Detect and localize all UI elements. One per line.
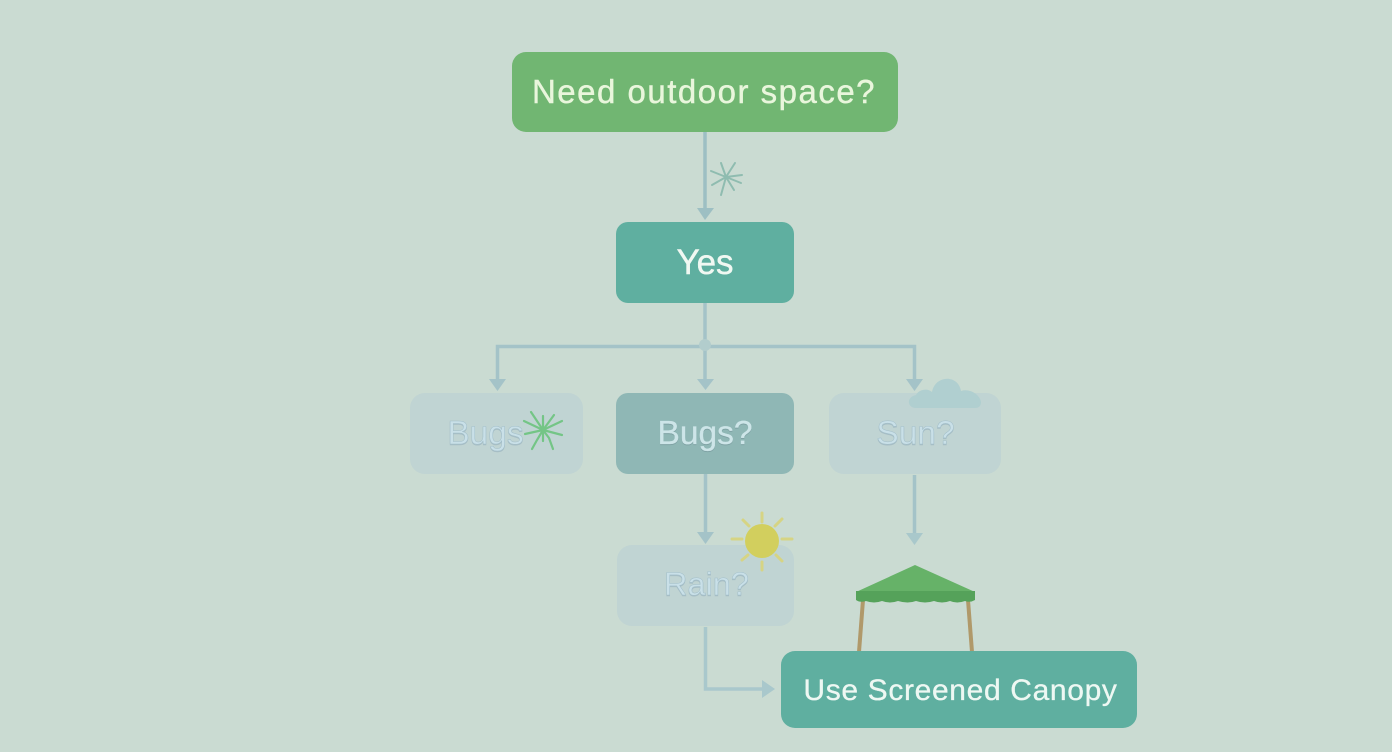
arrow: sun to canopy <box>906 475 923 545</box>
icon: green bug <box>524 412 562 449</box>
node: bugs middle <box>616 393 794 474</box>
arrow: middle bugs to rain <box>697 474 714 544</box>
node: bugs left: Bugs <box>447 415 524 452</box>
node: need outdoor space: Need outdoor space? <box>532 73 876 110</box>
node: rain: Rain? <box>664 566 749 602</box>
node: use screened canopy: Use Screened Canopy <box>803 674 1118 707</box>
node: rain <box>617 545 794 626</box>
node: sun: Sun? <box>876 415 955 452</box>
icon: cloud <box>909 379 981 408</box>
node: need outdoor space <box>512 52 898 132</box>
icon: canopy <box>856 565 975 652</box>
node: sun <box>829 393 1001 474</box>
node: bugs middle: Bugs? <box>658 415 752 452</box>
node: bugs left <box>410 393 583 474</box>
arrow: question to yes <box>697 132 714 220</box>
arrow: rain to use screened canopy <box>706 627 775 698</box>
node: yes: Yes <box>676 243 734 282</box>
icon: small bug <box>711 163 742 195</box>
node: use screened canopy <box>781 651 1137 728</box>
icon: sun <box>732 513 792 570</box>
node: yes <box>616 222 794 303</box>
arrow: branch from yes to three questions <box>489 303 923 391</box>
